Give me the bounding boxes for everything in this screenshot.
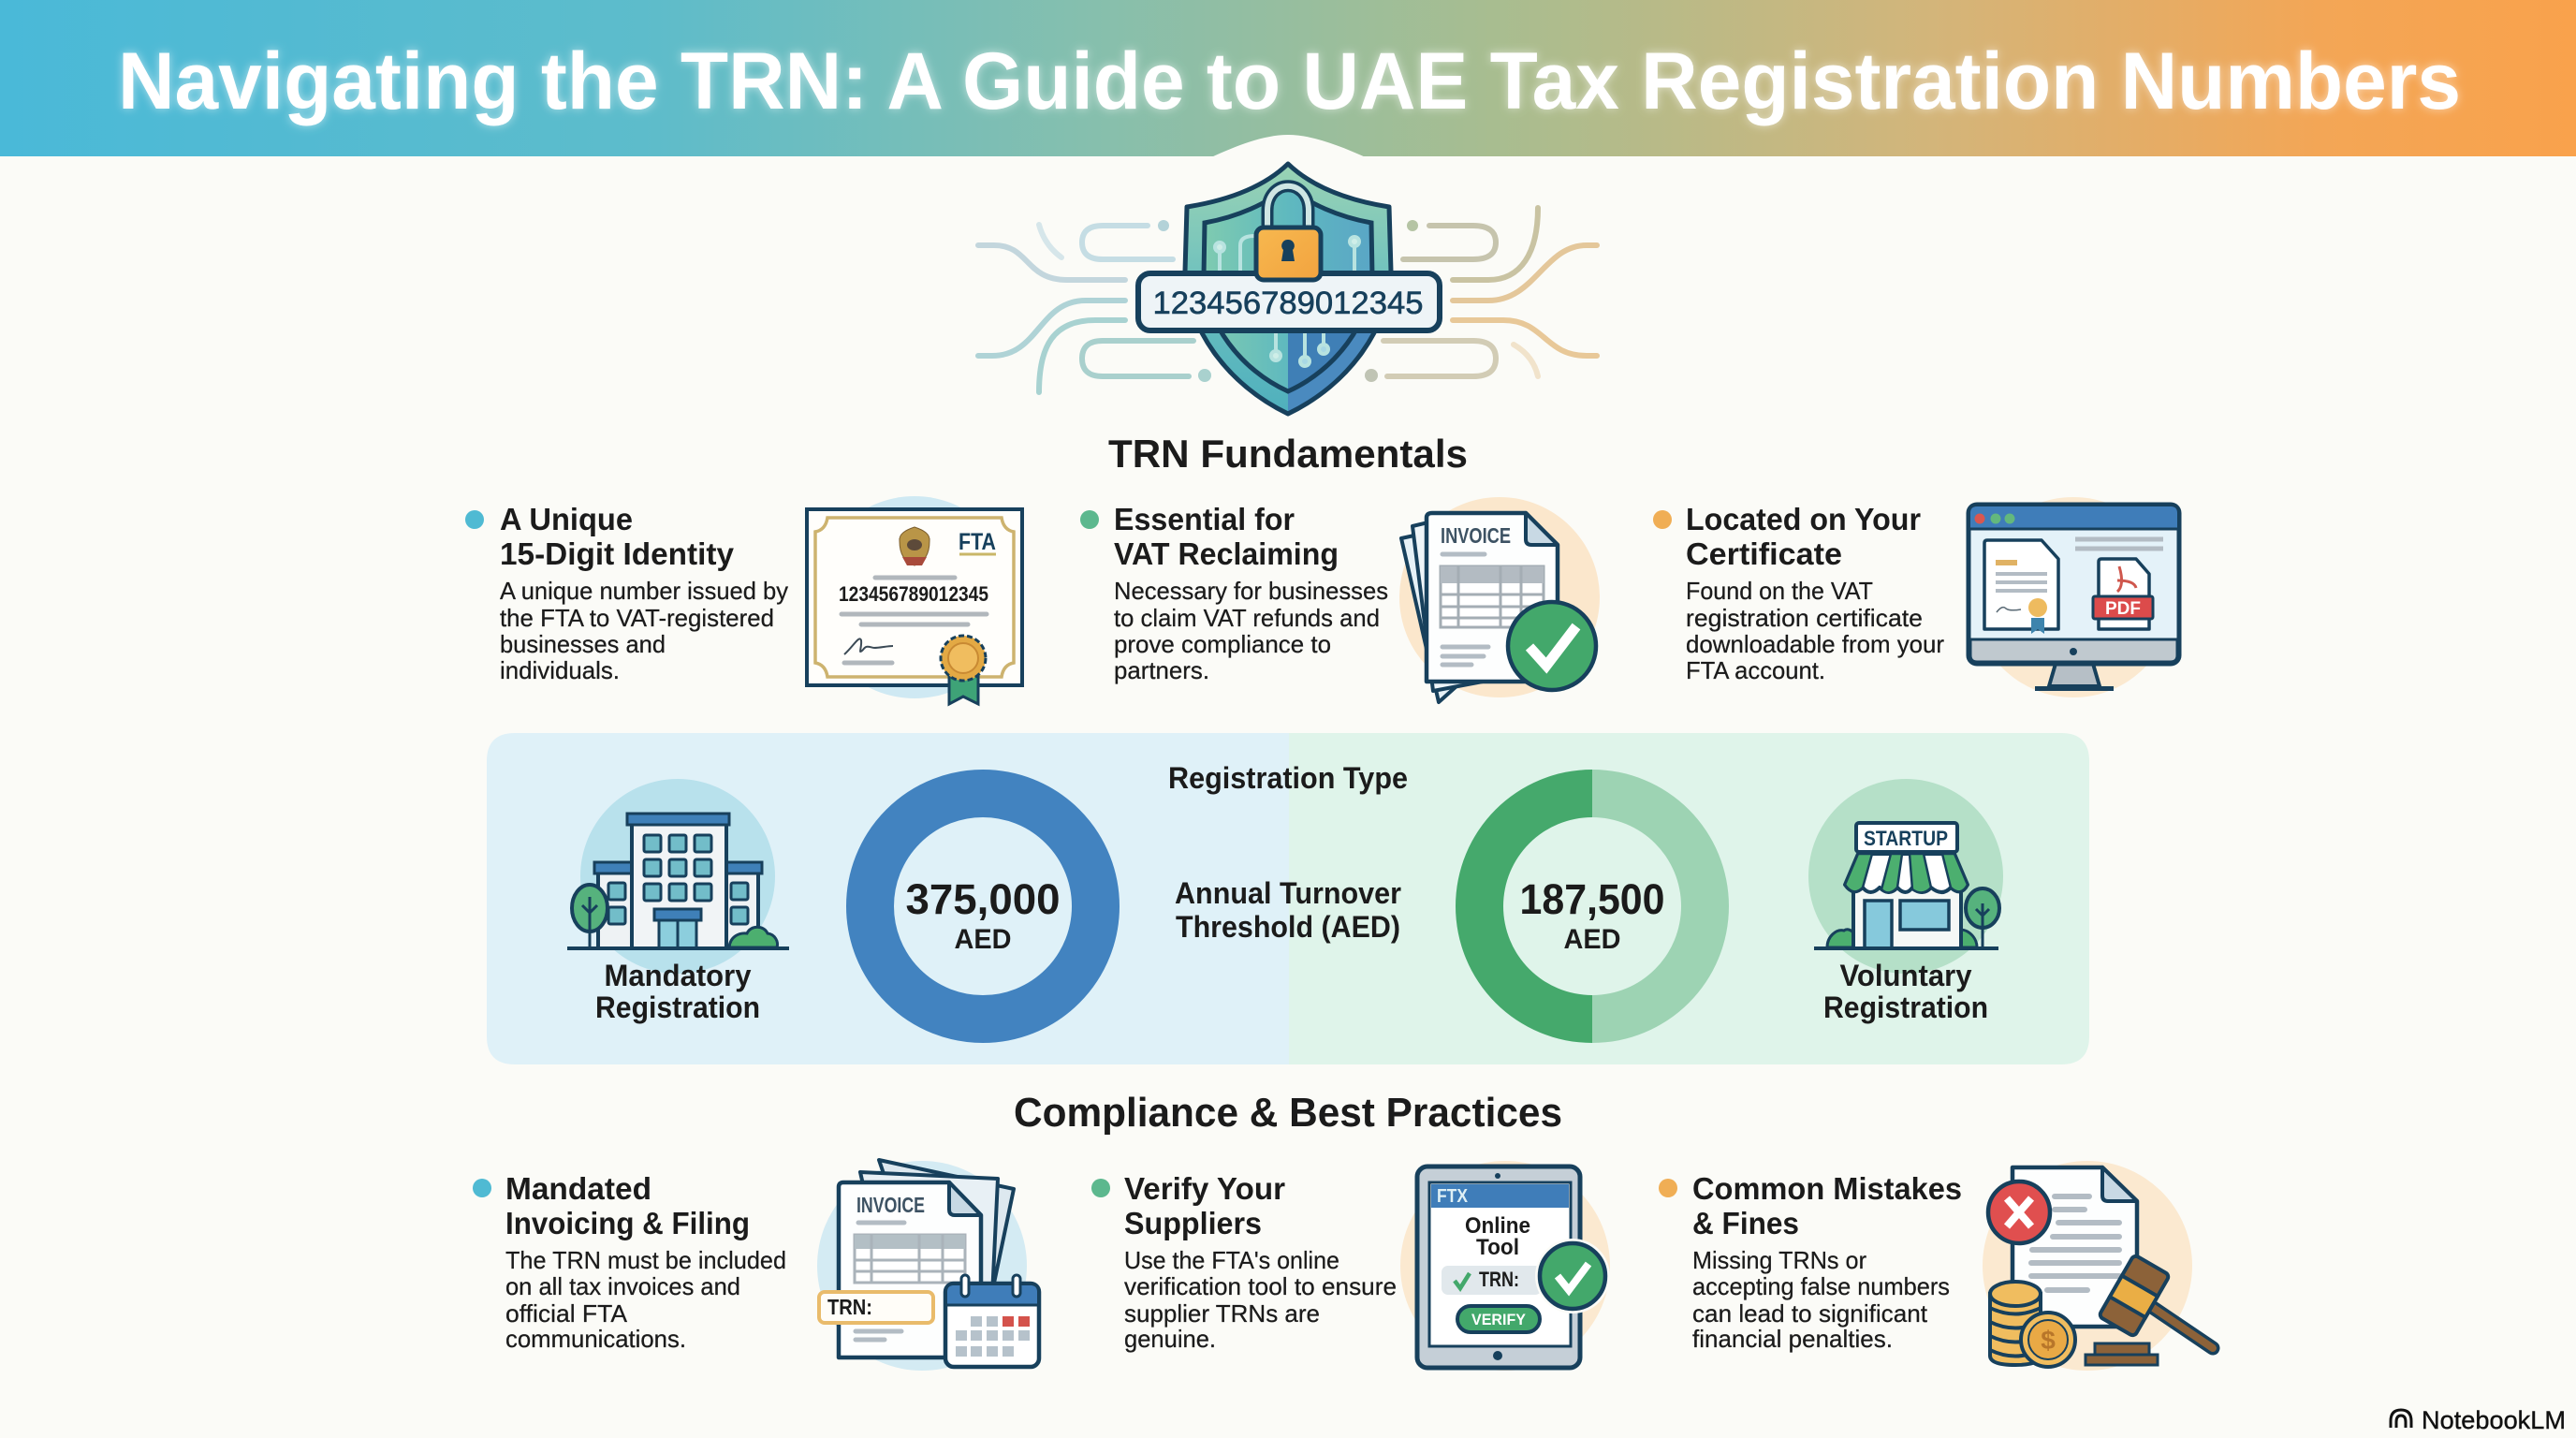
item: common mistakes and fines: financial penalties. — [1692, 1325, 1893, 1353]
item: located on your certificate: Found on the VAT — [1686, 577, 1873, 605]
item: verify your suppliers: supplier TRNs are — [1124, 1299, 1320, 1328]
label: annual turnover threshold: Threshold (AED) — [1176, 910, 1400, 944]
hero: shield with padlock and number: 123456789012345 — [1153, 286, 1423, 321]
item: mandated invoicing and filing: The TRN must be included — [505, 1246, 786, 1274]
number bar — [1138, 273, 1440, 330]
item: located on your certificate: FTA account. — [1686, 656, 1825, 684]
item: unique 15-digit identity: A Unique — [500, 502, 633, 536]
chart: 187,500 AED donut: AED — [1563, 924, 1621, 955]
hero: circuit lines right — [1365, 208, 1597, 382]
icon: invoice with TRN field and calendar: INVOICE — [856, 1193, 925, 1217]
hero: shield with padlock and number — [1138, 164, 1440, 419]
title: Navigating the TRN: A Guide to UAE Tax Registration Numbers — [118, 37, 2461, 126]
item: located on your certificate: Certificate — [1686, 536, 1842, 571]
hero: circuit lines left — [978, 220, 1211, 392]
item: verify your suppliers: Verify Your — [1124, 1171, 1285, 1206]
icon: tablet with online verification tool: Online — [1465, 1213, 1530, 1239]
icon: monitor showing certificate and PDF: PDF — [2105, 599, 2141, 619]
panel: registration comparison — [487, 733, 2089, 1064]
item: mandated invoicing and filing: on all tax invoices and — [505, 1272, 740, 1300]
item: essential for VAT reclaiming: Necessary for businesses — [1114, 577, 1388, 605]
item: essential for VAT reclaiming: partners. — [1114, 656, 1209, 684]
icon: fines with document, coins and gavel — [1983, 1161, 2213, 1371]
icon: FTA certificate: FTA — [959, 529, 996, 555]
item: located on your certificate: Located on Your — [1686, 502, 1921, 536]
lock body — [1256, 227, 1321, 280]
item: common mistakes and fines: can lead to significant — [1692, 1299, 1928, 1328]
item: unique 15-digit identity: individuals. — [500, 656, 620, 684]
item: located on your certificate — [1653, 502, 1944, 684]
icon: invoice with TRN field and calendar: TRN: — [827, 1295, 872, 1319]
item: unique 15-digit identity — [465, 502, 788, 684]
icon: invoice with check: INVOICE — [1441, 523, 1511, 548]
item: essential for VAT reclaiming: Essential for — [1114, 502, 1295, 536]
icon: tablet with online verification tool: TRN: — [1479, 1268, 1519, 1291]
label: mandatory registration: Mandatory — [605, 959, 752, 992]
item: common mistakes and fines: & Fines — [1692, 1206, 1799, 1240]
item: common mistakes and fines: accepting false numbers — [1692, 1272, 1950, 1300]
item: verify your suppliers: verification tool to ensure — [1124, 1272, 1397, 1300]
item: unique 15-digit identity: A unique number issued by — [500, 577, 788, 605]
label: mandatory registration: Registration — [595, 990, 760, 1024]
chart: 375,000 AED donut — [871, 794, 1095, 1019]
chart: 187,500 AED donut: 187,500 — [1520, 875, 1664, 923]
item: essential for VAT reclaiming: VAT Reclaiming — [1114, 536, 1339, 571]
label: voluntary registration: Voluntary — [1840, 959, 1972, 992]
item: verify your suppliers: genuine. — [1124, 1325, 1216, 1353]
icon: tablet with online verification tool: FTX — [1437, 1186, 1469, 1207]
item: verify your suppliers — [1091, 1171, 1397, 1353]
icon: tablet with online verification tool — [1400, 1161, 1610, 1371]
header banner — [0, 0, 2576, 157]
icon: invoice with check — [1399, 497, 1600, 702]
item: unique 15-digit identity: 15-Digit Identity — [500, 536, 735, 571]
label: voluntary registration — [1823, 959, 1988, 1024]
icon: invoice with TRN field and calendar — [817, 1160, 1039, 1371]
watermark: NotebookLM: NotebookLM — [2422, 1406, 2566, 1434]
item: essential for VAT reclaiming: prove compliance to — [1114, 630, 1331, 658]
icon: startup shop: STARTUP — [1864, 827, 1948, 850]
heading: Compliance and Best Practices: Compliance & Best Practices — [1014, 1090, 1562, 1136]
heading: TRN Fundamentals: TRN Fundamentals — [1108, 432, 1468, 476]
icon: fines with document, coins and gavel: $ — [2041, 1326, 2056, 1355]
icon: office building — [567, 779, 789, 974]
item: located on your certificate: downloadable from your — [1686, 630, 1944, 658]
item: common mistakes and fines: Common Mistakes — [1692, 1171, 1962, 1206]
item: mandated invoicing and filing — [473, 1171, 786, 1353]
item: essential for VAT reclaiming: to claim VAT refunds and — [1114, 604, 1380, 632]
item: mandated invoicing and filing: communications. — [505, 1325, 686, 1353]
item: common mistakes and fines — [1659, 1171, 1962, 1353]
label: annual turnover threshold: Annual Turnover — [1175, 876, 1401, 910]
label: mandatory registration — [595, 959, 760, 1024]
icon: tablet with online verification tool: Tool — [1476, 1235, 1519, 1260]
item: mandated invoicing and filing: Mandated — [505, 1171, 651, 1206]
item: common mistakes and fines: Missing TRNs or — [1692, 1246, 1866, 1274]
label: registration type: Registration Type — [1168, 761, 1408, 795]
label: annual turnover threshold — [1175, 876, 1401, 944]
shackle — [1267, 186, 1309, 229]
item: verify your suppliers: Suppliers — [1124, 1206, 1262, 1240]
icon: FTA certificate — [807, 496, 1022, 704]
item: located on your certificate: registration certificate — [1686, 604, 1923, 632]
item: verify your suppliers: Use the FTA's online — [1124, 1246, 1339, 1274]
item: mandated invoicing and filing: Invoicing & Filing — [505, 1206, 750, 1240]
icon: startup shop — [1808, 779, 2003, 974]
chart: 375,000 AED donut: 375,000 — [906, 875, 1060, 923]
icon: FTA certificate: 123456789012345 — [839, 582, 988, 606]
chart: 187,500 AED donut — [1456, 770, 1729, 1043]
item: unique 15-digit identity: businesses and — [500, 630, 666, 658]
icon: monitor showing certificate and PDF — [1969, 497, 2179, 697]
shield circuit traces — [1215, 236, 1359, 366]
item: essential for VAT reclaiming — [1080, 502, 1388, 684]
item: unique 15-digit identity: the FTA to VAT-registered — [500, 604, 774, 632]
chart: 375,000 AED donut: AED — [955, 924, 1011, 955]
item: mandated invoicing and filing: official FTA — [505, 1299, 628, 1328]
icon: tablet with online verification tool: VERIFY — [1471, 1311, 1527, 1328]
label: voluntary registration: Registration — [1823, 990, 1988, 1024]
